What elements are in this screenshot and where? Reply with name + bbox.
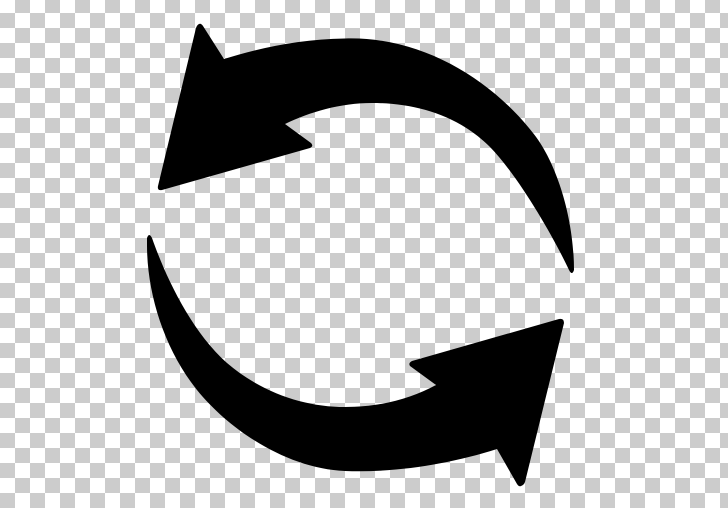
icon: upper arrow pointing left: [158, 24, 574, 273]
icon: lower arrow pointing right: [147, 235, 564, 486]
